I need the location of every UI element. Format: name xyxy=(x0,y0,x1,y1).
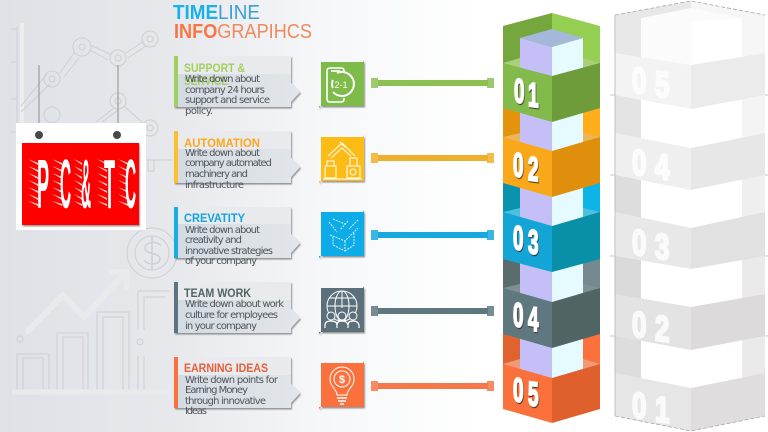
background line chart art xyxy=(11,23,172,171)
panel: support and service: policy. xyxy=(185,106,213,117)
block 01: 0 xyxy=(514,71,525,111)
panel: creativity: innovative strategies xyxy=(185,246,273,257)
hanging sign: PC&TC logo xyxy=(16,65,146,230)
block 05 xyxy=(503,330,600,423)
ghost block 02 xyxy=(615,256,765,350)
panel: automation: AUTOMATION xyxy=(184,136,260,150)
block 01 xyxy=(503,13,600,122)
arrow: connector 5 xyxy=(371,381,494,391)
panel: earning ideas: Earning Money xyxy=(185,385,248,396)
hanging sign: PC&TC logo: C xyxy=(125,144,136,223)
ghost block 03 xyxy=(615,175,765,269)
icon: 24 hour phone xyxy=(319,60,364,108)
panel: team work: Write down about work xyxy=(185,299,284,310)
block 03 xyxy=(503,175,600,272)
title xyxy=(173,2,312,43)
hanging sign: PC&TC logo: P xyxy=(37,145,49,223)
ghost block 03: 0 xyxy=(632,222,646,264)
panel: automation xyxy=(174,131,300,191)
arrow: connector 1 xyxy=(371,78,494,88)
ghost block 01 xyxy=(615,336,765,431)
ghost block 02: 2 xyxy=(655,308,669,350)
panel: support and service: support and service xyxy=(185,95,270,106)
icon: dollar light bulb xyxy=(319,361,364,409)
panel: creativity xyxy=(174,207,300,267)
panel: support and service: SUPPORT & xyxy=(184,61,245,75)
panel: support and service: company 24 hours xyxy=(185,85,265,96)
panel: team work xyxy=(174,282,300,333)
panel: creativity: creativity and xyxy=(185,235,242,246)
arrow: connector 4 xyxy=(371,306,494,316)
title: TIMELINE xyxy=(173,2,260,24)
ghost block 02: 0 xyxy=(632,304,646,346)
icon: global team xyxy=(319,286,364,334)
panel: creativity: of your company xyxy=(185,256,257,267)
block 04 xyxy=(503,255,600,348)
block 02: 0 xyxy=(513,145,524,185)
panel: earning ideas: Write down points for xyxy=(185,375,279,386)
panel: earning ideas: EARNING IDEAS xyxy=(184,361,268,375)
panel: earning ideas xyxy=(174,357,300,417)
panel: support and service: SERVICE xyxy=(184,74,228,88)
panel: automation: infrastructure xyxy=(185,180,244,191)
arrow: connector 2 xyxy=(371,153,494,163)
ghost block 04 xyxy=(615,95,765,190)
panel: creativity: Write down about xyxy=(185,225,260,236)
panel: earning ideas: through innovative xyxy=(185,396,266,407)
ghost stack tower xyxy=(610,1,768,431)
panel: support and service: Write down about xyxy=(185,74,260,85)
panel: team work: TEAM WORK xyxy=(184,286,251,300)
icon: robot arm xyxy=(319,135,364,183)
background growth bars and dollar art xyxy=(12,228,177,392)
ghost block 01: 1 xyxy=(655,389,669,431)
panel: team work: in your company xyxy=(185,321,257,332)
panel: team work: culture for employees xyxy=(185,310,278,321)
block 03: 3 xyxy=(528,222,539,262)
icon: dollar light bulb: $ xyxy=(339,374,345,386)
panel: support and service xyxy=(174,56,300,117)
arrow: connector 3 xyxy=(371,230,494,240)
icon: 24 hour phone: 2-1 xyxy=(334,80,348,90)
block 01: 1 xyxy=(528,75,539,115)
icon: creativity box xyxy=(319,210,364,258)
ghost block 01: 0 xyxy=(632,385,646,427)
ghost block 03: 3 xyxy=(655,226,669,268)
hanging sign: PC&TC logo: T xyxy=(104,145,115,223)
ghost block 05: 5 xyxy=(655,64,669,106)
block 02: 2 xyxy=(528,149,539,189)
block 04: 0 xyxy=(513,295,524,335)
panel: automation: machinery and xyxy=(185,169,248,180)
hanging sign: PC&TC logo: & xyxy=(81,144,91,223)
block 02 xyxy=(503,100,600,197)
panel: creativity: CREVATITY xyxy=(184,211,245,225)
panel: automation: Write down about xyxy=(185,148,260,159)
ghost block 04: 4 xyxy=(655,146,670,188)
panel: earning ideas: Ideas xyxy=(185,406,207,417)
ghost block 04: 0 xyxy=(632,142,646,184)
block 05: 0 xyxy=(513,370,524,410)
hanging sign: PC&TC logo: C xyxy=(60,144,71,223)
ghost block 05: 0 xyxy=(632,60,646,102)
colored stack tower xyxy=(503,13,600,423)
title: INFOGRAPIHCS xyxy=(174,21,312,43)
block 03: 0 xyxy=(513,218,524,258)
panel: automation: company automated xyxy=(185,158,272,169)
block 05: 5 xyxy=(528,374,539,414)
ghost block 05 xyxy=(615,1,765,109)
block 04: 4 xyxy=(528,299,539,339)
